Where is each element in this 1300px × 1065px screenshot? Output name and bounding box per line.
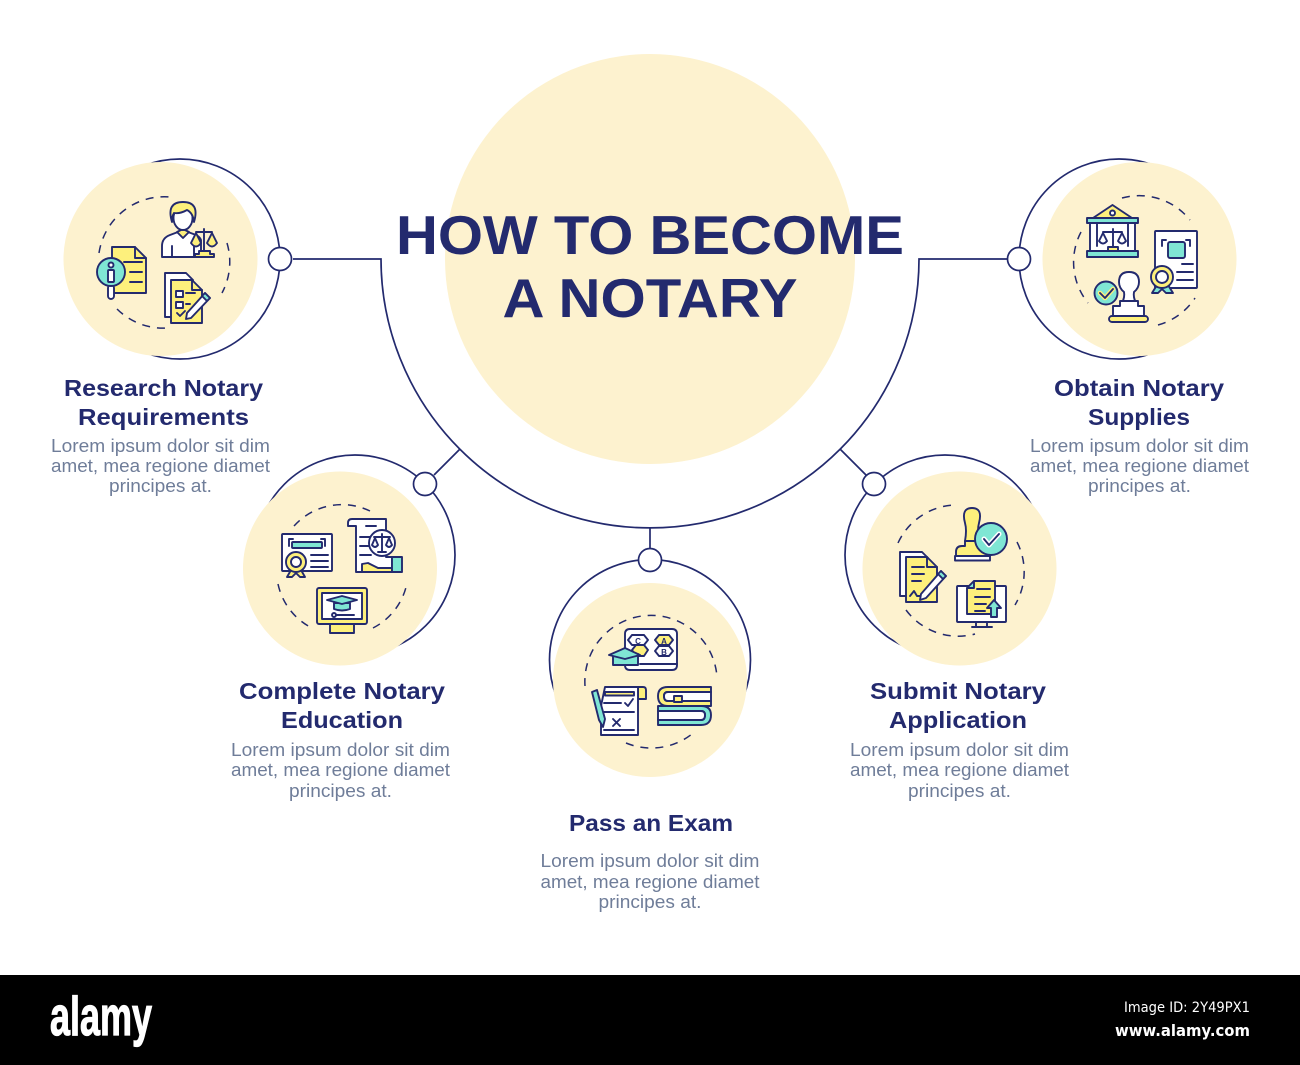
body text 5: Lorem ipsum dolor sit dim: [1030, 436, 1249, 456]
icon: stacked books: [658, 687, 711, 725]
heading 5: Supplies: [1088, 404, 1190, 430]
outline ring 1: [80, 159, 280, 359]
icon: online graduation monitor: [317, 588, 367, 633]
footer url: www.alamy.com: [1115, 1021, 1250, 1040]
node 1: [268, 248, 292, 270]
title: A NOTARY: [502, 267, 798, 329]
footer logo: alamy: [50, 985, 152, 1047]
body text 4: amet, mea regione diamet: [850, 760, 1069, 780]
central circle: [445, 54, 855, 464]
icon: multiple choice laptop with cap: [609, 629, 677, 670]
body text 2: amet, mea regione diamet: [231, 760, 450, 780]
title: HOW TO BECOME: [396, 204, 904, 266]
body text 3: amet, mea regione diamet: [540, 872, 760, 892]
heading 2: [239, 678, 445, 733]
heading 4: Submit Notary: [870, 678, 1046, 704]
icon: document with info magnifier: [97, 247, 146, 299]
step 1: research notary requirements: [51, 159, 292, 496]
icon: multiple choice laptop with cap: C: [635, 637, 641, 646]
body text 1: [51, 436, 270, 496]
node 4: [862, 472, 886, 496]
icon: upload application monitor: [957, 581, 1006, 627]
icon: certificate: [282, 534, 332, 577]
heading 1: Research Notary: [64, 375, 263, 401]
body text 2: [231, 740, 450, 801]
dashed ring 4: [898, 505, 1024, 636]
badge circle 3: [553, 583, 747, 777]
step 5: obtain notary supplies: [1008, 159, 1249, 496]
icon: license certificate: [1151, 231, 1197, 293]
node 5: [1008, 248, 1030, 270]
icon: stamp and seal check: [1094, 272, 1148, 322]
step 2: complete notary education: [231, 455, 455, 801]
heading 5: Obtain Notary: [1054, 375, 1224, 401]
body text 2: principes at.: [289, 781, 392, 801]
node 3: [638, 548, 662, 572]
body text 1: principes at.: [109, 476, 212, 496]
body text 5: [1030, 436, 1249, 496]
title: [396, 204, 904, 329]
outline ring 4: [845, 455, 1045, 655]
icon: signed documents and pencil: [900, 552, 946, 602]
body text 4: [850, 740, 1069, 801]
body text 3: Lorem ipsum dolor sit dim: [540, 851, 760, 871]
heading 5: [1054, 375, 1224, 430]
body text 4: principes at.: [908, 781, 1011, 801]
body text 1: Lorem ipsum dolor sit dim: [51, 436, 270, 456]
step 3: pass an exam: [540, 548, 760, 912]
icon: checklist and pencil: [165, 273, 210, 323]
heading 4: [870, 678, 1046, 733]
body text 3: [540, 851, 760, 912]
outline ring 2: [255, 455, 455, 655]
heading 3: Pass an Exam: [569, 810, 733, 836]
body text 2: Lorem ipsum dolor sit dim: [231, 740, 450, 760]
outline ring 5: [1019, 159, 1219, 359]
badge circle 4: [862, 472, 1056, 666]
heading 1: Requirements: [78, 404, 249, 430]
badge circle 1: [64, 162, 258, 356]
connector arc and lines: [293, 259, 1007, 548]
badge circle 5: [1042, 162, 1236, 356]
heading 4: Application: [889, 707, 1027, 733]
dashed ring 3: [585, 615, 717, 748]
dashed ring 1: [99, 197, 230, 328]
body text 4: Lorem ipsum dolor sit dim: [850, 740, 1069, 760]
icon: multiple choice laptop with cap: A: [661, 637, 667, 646]
outline ring 3: [550, 560, 750, 760]
body text 5: amet, mea regione diamet: [1030, 456, 1249, 476]
icon: courthouse: [1087, 205, 1138, 257]
dashed ring 2: [278, 505, 407, 628]
body text 1: amet, mea regione diamet: [51, 456, 270, 476]
footer image id: Image ID: 2Y49PX1: [1124, 1000, 1250, 1016]
icon: multiple choice laptop with cap: B: [661, 648, 667, 657]
heading 2: Complete Notary: [239, 678, 445, 704]
icon: legal scroll with scales: [348, 519, 402, 572]
icon: stamp with check: [955, 508, 1007, 560]
badge circle 2: [243, 472, 437, 666]
heading 2: Education: [281, 707, 403, 733]
body text 5: principes at.: [1088, 476, 1191, 496]
body text 3: principes at.: [598, 892, 702, 912]
icon: exam paper and pen: [592, 687, 646, 735]
dashed ring 5: [1074, 196, 1195, 325]
icon: notary person with scales: [162, 202, 217, 257]
footer bar: [0, 975, 1300, 1065]
heading 1: [64, 375, 263, 430]
step 4: submit notary application: [845, 455, 1069, 801]
node 2: [414, 472, 436, 496]
